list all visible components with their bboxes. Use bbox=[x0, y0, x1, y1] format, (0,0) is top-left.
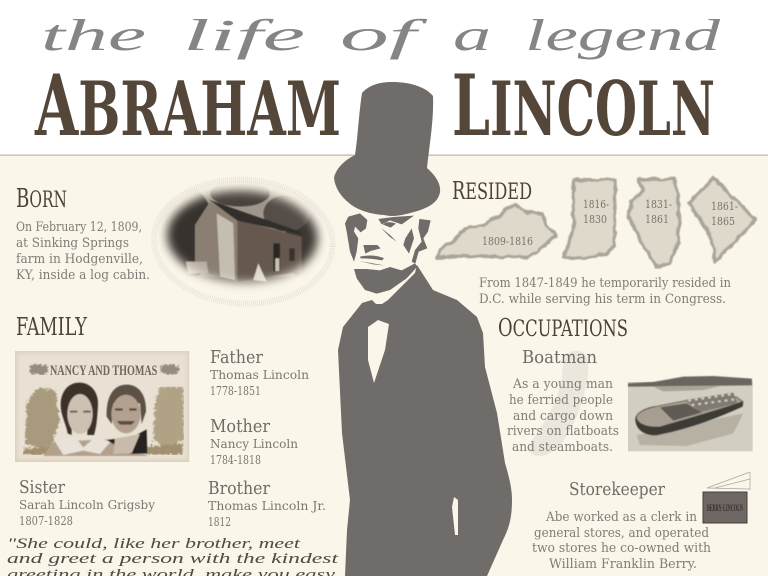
title: Abraham Lincoln: ABRAHAM bbox=[34, 56, 341, 155]
heading: Family: FAMILY bbox=[16, 313, 88, 341]
Kentucky 1809-1816: 1809-1816 bbox=[482, 234, 533, 248]
Mother: 1784-1818 bbox=[210, 452, 261, 467]
heading: Occupations: OCCUPATIONS bbox=[498, 314, 628, 342]
Mother: Mother bbox=[210, 416, 270, 437]
Brother: Thomas Lincoln Jr. bbox=[208, 498, 326, 513]
Storekeeper: two stores he co-owned with bbox=[532, 541, 712, 556]
flatboat engraving bbox=[628, 376, 753, 451]
Illinois 1831-1861: 1861 bbox=[645, 212, 669, 226]
Indiana 1816-1830: 1816- bbox=[583, 197, 609, 211]
Illinois 1831-1861: 1831- bbox=[645, 197, 672, 211]
Born text: farm in Hodgenville, bbox=[16, 252, 143, 267]
handwritten quote: "She could, like her brother, meet bbox=[7, 536, 301, 552]
Boatman bbox=[507, 347, 619, 455]
section: Family bbox=[15, 313, 326, 529]
Father: Thomas Lincoln bbox=[210, 367, 309, 382]
title: the life of a legend: a bbox=[453, 11, 491, 60]
Sister: Sarah Lincoln Grigsby bbox=[19, 497, 156, 512]
Indiana 1816-1830: 1830 bbox=[583, 212, 607, 226]
Born text bbox=[16, 220, 150, 283]
Storekeeper bbox=[532, 479, 712, 572]
section: Born bbox=[16, 184, 150, 283]
heading: Resided: RESIDED bbox=[452, 177, 532, 205]
handwritten quote: and greet a person with the kindest bbox=[7, 551, 339, 567]
oval photo of log cabin bbox=[151, 175, 336, 308]
Sister: 1807-1828 bbox=[19, 513, 73, 528]
Washington D.C. 1861-1865: 1865 bbox=[711, 214, 735, 228]
title: the life of a legend: legend bbox=[525, 11, 722, 60]
face details bbox=[345, 213, 431, 294]
section: Occupations bbox=[498, 314, 753, 572]
Boatman: As a young man bbox=[512, 377, 614, 392]
portrait image: Nancy and Thomas bbox=[15, 351, 189, 462]
Born text: at Sinking Springs bbox=[16, 236, 129, 251]
Mother: Nancy Lincoln bbox=[210, 436, 298, 451]
title: the life of a legend bbox=[41, 11, 722, 60]
Boatman: rivers on flatboats bbox=[507, 424, 619, 439]
section: Resided bbox=[437, 177, 756, 307]
Father: 1778-1851 bbox=[210, 383, 261, 398]
Father: Father bbox=[210, 347, 263, 368]
portrait image: Nancy and Thomas: NANCY AND THOMAS bbox=[50, 363, 157, 379]
body bbox=[338, 265, 512, 576]
Mother bbox=[210, 416, 298, 467]
Born text: On February 12, 1809, bbox=[16, 220, 142, 235]
Boatman: Boatman bbox=[522, 347, 597, 368]
Boatman: and steamboats. bbox=[512, 440, 613, 455]
Born text: KY, inside a log cabin. bbox=[16, 268, 150, 283]
Boatman: and cargo down bbox=[513, 409, 614, 424]
Brother: Brother bbox=[208, 478, 270, 499]
Brother bbox=[208, 478, 326, 529]
top hat bbox=[334, 82, 440, 216]
Resided note: D.C. while serving his term in Congress. bbox=[479, 292, 726, 307]
title: the life of a legend: life bbox=[183, 11, 305, 60]
Washington D.C. 1861-1865: 1861- bbox=[711, 199, 738, 213]
Boatman: he ferried people bbox=[509, 393, 613, 408]
title: the life of a legend: the bbox=[41, 11, 146, 60]
title: the life of a legend: of bbox=[340, 11, 429, 60]
Storekeeper: Abe worked as a clerk in bbox=[545, 510, 698, 525]
Berry and Lincoln store sign bbox=[703, 472, 750, 523]
state maps with years bbox=[437, 178, 756, 267]
Washington D.C. 1861-1865 bbox=[688, 178, 756, 262]
Kentucky 1809-1816 bbox=[437, 205, 556, 257]
Father bbox=[210, 347, 309, 398]
Lincoln silhouette illustration bbox=[334, 82, 512, 576]
Storekeeper: Storekeeper bbox=[569, 479, 665, 500]
Storekeeper: William Franklin Berry. bbox=[549, 557, 697, 572]
Resided note bbox=[479, 276, 732, 307]
Sister: Sister bbox=[19, 477, 65, 498]
Brother: 1812 bbox=[208, 514, 231, 529]
Sister bbox=[19, 477, 156, 528]
Indiana 1816-1830 bbox=[563, 179, 615, 258]
faint swash behind Boatman bbox=[529, 351, 588, 456]
handwritten quote bbox=[7, 536, 339, 576]
title: Abraham Lincoln bbox=[34, 56, 715, 155]
Illinois 1831-1861 bbox=[628, 179, 679, 267]
heading: Born: BORN bbox=[16, 184, 67, 214]
Resided note: From 1847-1849 he temporarily resided in bbox=[479, 276, 732, 291]
Storekeeper: general stores, and operated bbox=[534, 526, 709, 541]
